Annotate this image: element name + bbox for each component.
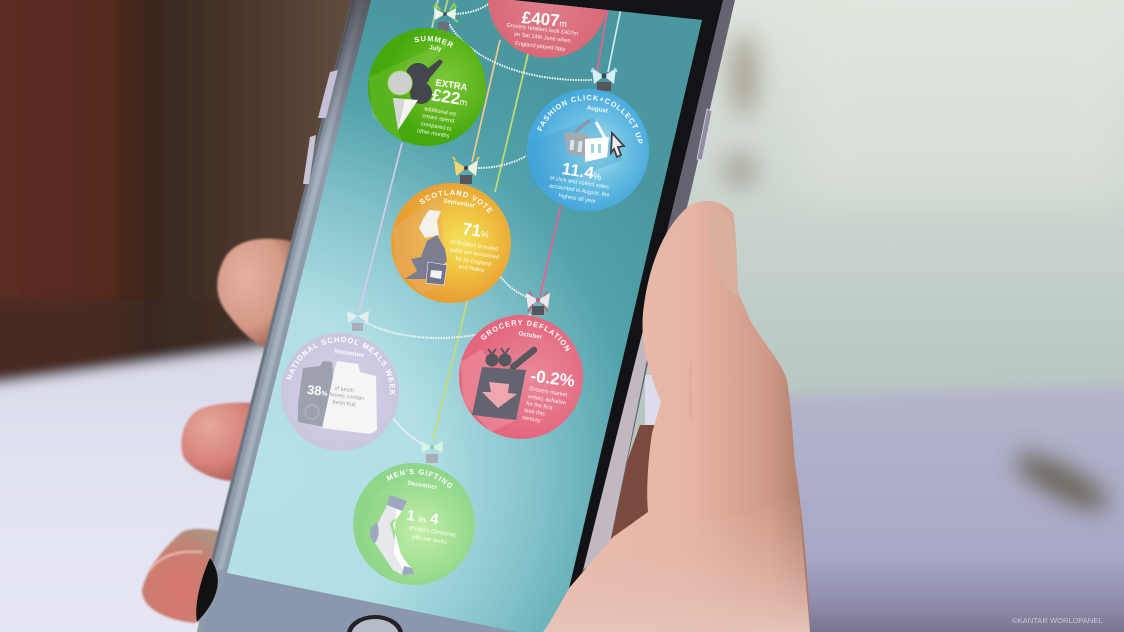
bauble: grocery deflation: Grocery market: [529, 386, 568, 399]
bauble: grocery spend: England played Italy: [515, 41, 566, 53]
bow: men's gifting: [421, 441, 443, 463]
copyright credit: ©KANTAR WORLDPANEL: [1012, 616, 1103, 625]
infographic contents on the screen: [281, 0, 649, 585]
bauble: grocery deflation: time this: [524, 408, 545, 418]
bow: school meals: [347, 311, 369, 331]
bauble: grocery deflation: GROCERY DEFLATION: [481, 320, 570, 352]
bauble: fashion click and collect: 11.4%: [561, 159, 603, 184]
bauble: fashion click and collect: highest all year: [558, 193, 596, 205]
bow: grocery deflation: [526, 291, 550, 315]
icon: map of Britain with bag: [405, 210, 447, 285]
bauble: grocery spend: Grocery retailers took £407m: [506, 23, 579, 37]
bauble: men's gifting: gifts are socks: [411, 534, 447, 546]
bow: scotland: [453, 157, 479, 184]
icon: ice cream: [388, 59, 443, 130]
bauble: national school meals week: fresh fruit: [332, 400, 356, 408]
bauble: national school meals week: boxes contain: [330, 392, 365, 402]
icon: basket with cursor: [564, 120, 624, 162]
hand: fingers behind the phone: [142, 239, 668, 623]
bauble: men's gifting: December: [407, 480, 438, 491]
bow: summer: [432, 4, 458, 31]
bauble: fashion click and collect: of click and collect sales: [549, 175, 609, 191]
bauble: grocery spend: [488, 0, 608, 58]
bauble: scotland vote: and Wales: [458, 264, 485, 274]
bow: fashion: [591, 68, 617, 91]
bauble: grocery deflation: century: [522, 415, 541, 424]
bauble: national school meals week: [281, 333, 399, 451]
bauble: national school meals week: 38%: [306, 382, 329, 399]
bauble: grocery spend: on Sat 14th June when: [513, 32, 571, 44]
home button: [347, 615, 403, 632]
icon: sock: [370, 495, 414, 575]
bauble: scotland vote: [391, 183, 511, 303]
bauble: men's gifting: [353, 463, 475, 585]
bauble: grocery deflation: enters deflation: [528, 394, 566, 407]
hanging strings: [359, 0, 621, 440]
bauble: scotland vote: sales are accounted: [449, 247, 499, 261]
bauble: men's gifting: of men's Christmas: [408, 525, 456, 539]
bauble: men's gifting: 1 in 4: [406, 507, 440, 528]
bauble: summer: cream spend: [422, 113, 455, 125]
dotted garlands: [365, 3, 592, 446]
bauble: grocery deflation: October: [518, 330, 543, 341]
phone body: [195, 0, 735, 632]
bauble: scotland vote: 71%: [461, 219, 490, 242]
bauble: scotland vote: September: [443, 198, 476, 210]
bauble: summer: July: [429, 44, 442, 53]
icon: lunch box with apple: [298, 361, 377, 434]
hand: thumb over the phone: [543, 201, 810, 632]
bauble: scotland vote: of Scottish branded: [450, 239, 498, 253]
bauble: national school meals week: November: [334, 348, 365, 359]
bauble: summer: other months: [417, 128, 450, 140]
bauble: grocery spend: £407m: [521, 8, 568, 31]
bauble: grocery deflation: -0.2%: [529, 366, 576, 391]
bauble: scotland vote: SCOTLAND VOTE: [420, 190, 493, 214]
bauble: grocery deflation: [459, 315, 583, 439]
bauble: national school meals week: of lunch: [334, 386, 354, 394]
bauble: national school meals week: NATIONAL SCHOOL MEALS WEEK: [286, 336, 396, 395]
bauble: summer: £22m: [431, 85, 469, 110]
bauble: summer: additional ice: [424, 106, 457, 118]
bauble: grocery deflation: for the first: [526, 401, 553, 412]
bauble: summer: SUMMER: [414, 36, 453, 48]
bauble: summer: compared to: [420, 121, 452, 133]
icon: shopping bag with down arrow: [472, 348, 534, 420]
bauble: fashion click and collect: [527, 89, 649, 211]
bauble: summer: EXTRA: [435, 78, 468, 94]
bauble: scotland vote: for by England: [455, 256, 491, 268]
bauble: summer: [368, 28, 486, 146]
bauble: men's gifting: MEN'S GIFTING: [386, 468, 452, 488]
bauble: fashion click and collect: accounted in August, the: [548, 183, 610, 199]
bauble: fashion click and collect: August: [586, 104, 608, 115]
phone screen: [227, 0, 702, 632]
bauble: fashion click and collect: FASHION CLICK+COLLECT UP: [537, 94, 642, 144]
